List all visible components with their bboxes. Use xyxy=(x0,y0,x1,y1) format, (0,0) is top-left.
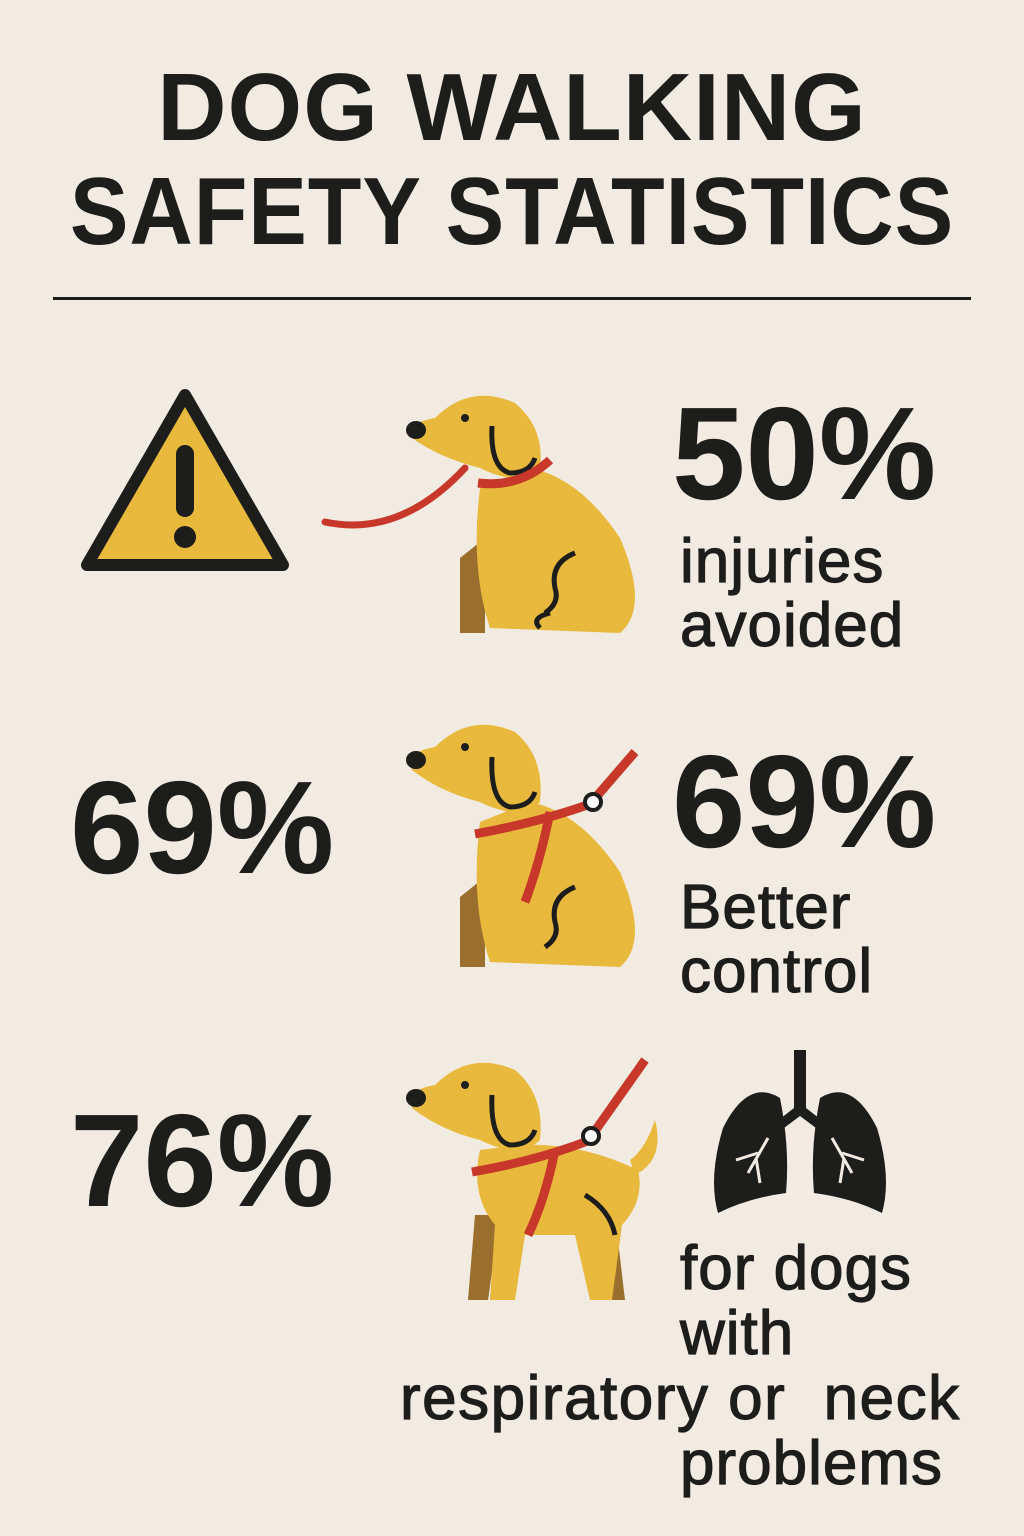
icon: standing dog with harness xyxy=(406,1057,658,1300)
title: DOG WALKING xyxy=(157,54,867,161)
icon: lungs xyxy=(714,1050,886,1213)
stat: 69% left: 69% xyxy=(70,754,334,901)
text: respiratory note xyxy=(400,1234,961,1498)
text: respiratory note: with xyxy=(680,1299,794,1368)
text: Better xyxy=(680,873,851,942)
text: avoided xyxy=(680,591,904,660)
stat: 69% better control: 69% xyxy=(672,728,936,875)
text: injuries xyxy=(680,527,884,596)
title: SAFETY STATISTICS xyxy=(70,158,954,265)
text: respiratory note: for dogs xyxy=(680,1234,912,1303)
text: respiratory note: respiratory or neck xyxy=(400,1364,961,1433)
title xyxy=(70,54,954,265)
text: control xyxy=(680,937,873,1006)
stat: 50% injuries avoided: 50% xyxy=(672,380,936,527)
stat: 76% left: 76% xyxy=(70,1087,334,1234)
text: respiratory note: problems xyxy=(680,1429,943,1498)
icon: dog with harness xyxy=(406,724,638,967)
icon: warning triangle xyxy=(81,389,289,571)
icon: dog with leash xyxy=(322,396,635,633)
